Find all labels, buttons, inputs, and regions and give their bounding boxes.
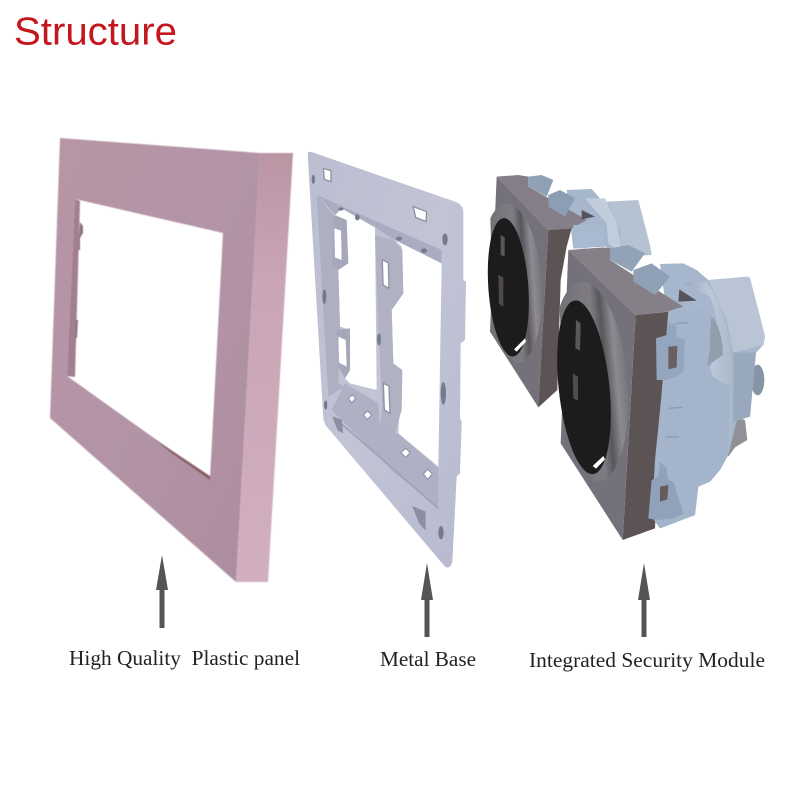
title: Structure [14, 10, 177, 54]
upper clip window [668, 346, 677, 369]
base inner wall left [317, 195, 345, 397]
rear shell [585, 198, 623, 255]
rear module face [490, 177, 548, 407]
rear module tabs [528, 175, 553, 197]
shell inner crescent [707, 315, 723, 367]
front socket ring [560, 282, 628, 480]
silver shell [683, 282, 733, 455]
side plate ticks [666, 323, 688, 437]
arrow: security module [638, 563, 650, 637]
lower clips [332, 417, 343, 433]
rear box lower [733, 353, 756, 422]
front module side [623, 312, 668, 540]
front module face [561, 250, 636, 540]
front module top [568, 247, 683, 315]
rear module body [567, 189, 623, 257]
frame side edge [236, 153, 293, 582]
arrow: metal base [421, 563, 433, 637]
side plate [652, 308, 730, 528]
rear knob [751, 365, 764, 395]
inner recess bottom [153, 438, 210, 480]
rear module box [607, 200, 652, 257]
panel: socket modules [476, 175, 765, 540]
terminal screw [723, 417, 747, 457]
panel: metal base [308, 152, 466, 568]
base top ledge [317, 195, 442, 263]
arrow: plastic panel [156, 555, 168, 628]
rear socket slit [514, 338, 526, 352]
front socket contacts [575, 320, 581, 351]
panel: plastic frame [50, 138, 293, 582]
label: metal base: Metal Base [380, 647, 476, 671]
label: security module: Integrated Security Module [529, 648, 765, 672]
window: rib right top [382, 260, 389, 288]
base plate [308, 152, 466, 568]
inner recess left [67, 199, 80, 377]
front module [544, 245, 765, 540]
inner clips [75, 222, 83, 338]
frame front face [50, 138, 260, 582]
base lower rail [332, 383, 438, 507]
rear module side [538, 228, 572, 407]
front socket well [550, 298, 618, 477]
rear socket ring [490, 204, 542, 362]
window: top tab left [323, 168, 331, 182]
rear box upper [708, 277, 765, 353]
base centre rib [375, 235, 403, 433]
upper clip [656, 323, 685, 380]
small rail holes [348, 395, 432, 479]
rib frame left bottom [337, 328, 350, 378]
label: plastic panel: High Quality Plastic panel [69, 646, 300, 670]
module silhouette [652, 263, 765, 528]
base rail groove [333, 417, 438, 508]
window: top tab right [413, 207, 427, 222]
infographic canvas [16, 17, 765, 672]
front module tabs [610, 245, 645, 272]
lower clip [648, 462, 683, 520]
window: rib right bottom [383, 383, 390, 413]
screw and pin holes [312, 175, 448, 539]
rear socket well [484, 217, 533, 358]
rear socket contacts [501, 235, 505, 257]
window: rib left bottom [338, 337, 347, 367]
window: rib left top [334, 228, 342, 260]
rib frame left top [332, 215, 348, 270]
front socket slit [593, 456, 605, 469]
rear module [476, 175, 652, 407]
rear module top [497, 175, 587, 230]
lower clip window [660, 485, 668, 502]
rear module clip [573, 225, 605, 248]
